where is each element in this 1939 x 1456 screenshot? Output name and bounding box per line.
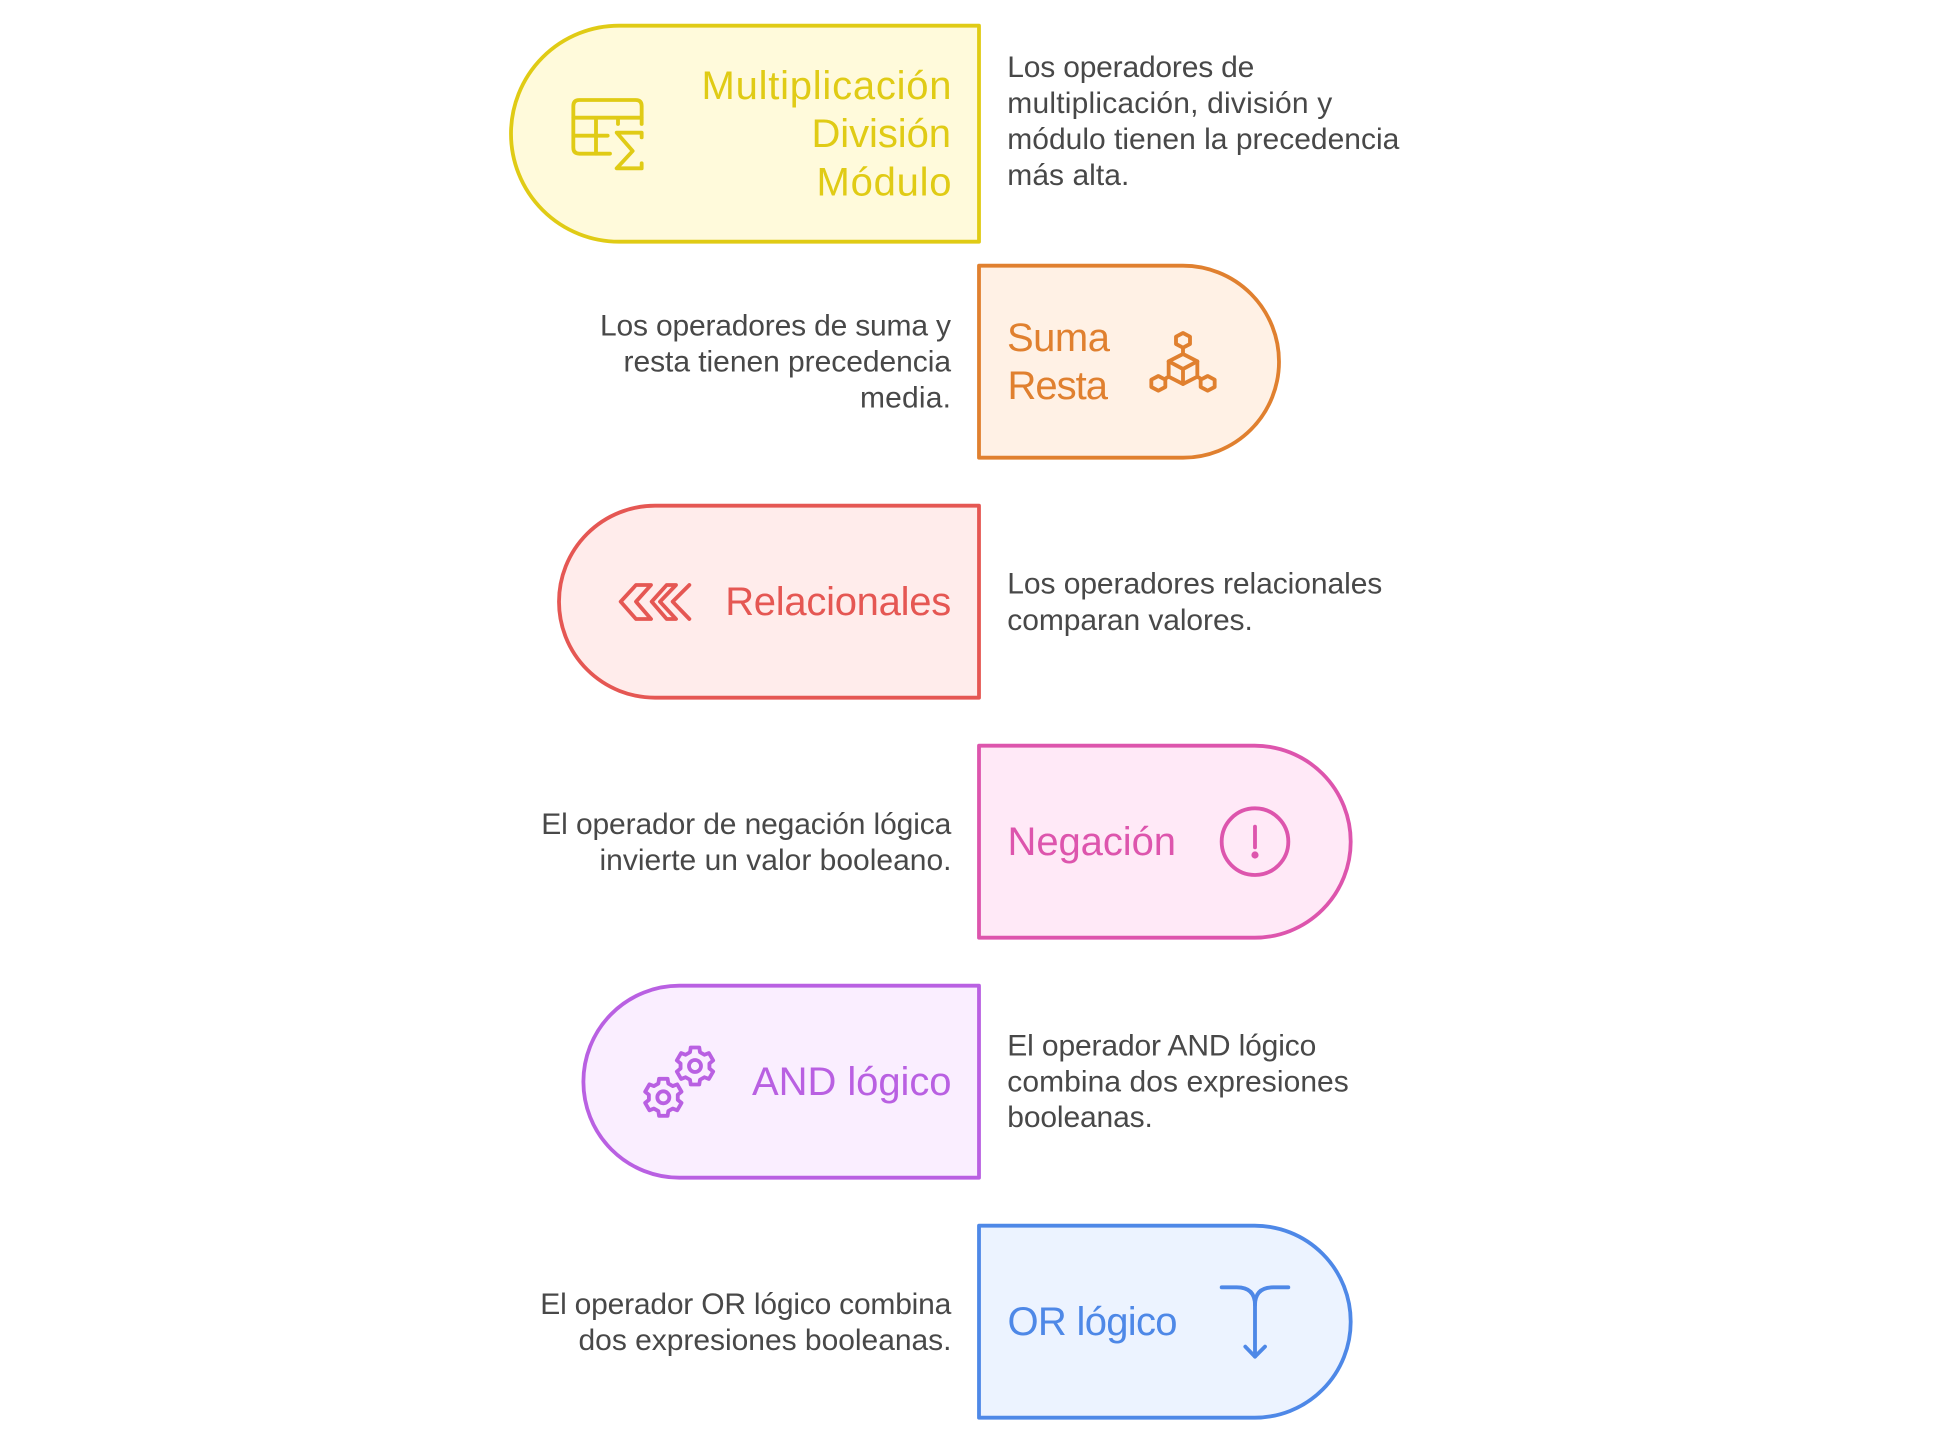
description: OR lógico: dos expresiones booleanas.: [578, 1324, 952, 1357]
description: AND lógico: [1007, 1030, 1349, 1134]
description: multiplicación: multiplicación, división y: [1007, 87, 1332, 120]
icon: table with sigma: [573, 100, 642, 168]
heading: Suma Resta: Resta: [1008, 364, 1109, 408]
panel shape: orange: [979, 266, 1279, 458]
panel: Suma Resta: [979, 266, 1279, 458]
heading: Relacionales: Relacionales: [725, 580, 951, 624]
description: AND lógico: booleanas.: [1007, 1101, 1153, 1134]
panel: Negación: [979, 746, 1351, 938]
heading: Negación: Negación: [1008, 820, 1176, 864]
description: suma y resta: Los operadores de suma y: [600, 310, 951, 342]
panel: Multiplicación División Módulo: [511, 26, 979, 242]
heading: Suma Resta: Suma: [1007, 316, 1111, 360]
description: AND lógico: El operador AND lógico: [1007, 1030, 1316, 1062]
description: negación: El operador de negación lógica: [541, 808, 952, 841]
panel: AND lógico: [583, 986, 979, 1178]
panel: OR lógico: [979, 1226, 1351, 1418]
panel shape: yellow: [511, 26, 979, 242]
description: relacionales: Los operadores relacionales: [1007, 568, 1382, 600]
description: suma y resta: [600, 310, 951, 414]
description: OR lógico: El operador OR lógico combina: [540, 1288, 952, 1321]
description: multiplicación: Los operadores de: [1007, 51, 1254, 84]
description: relacionales: comparan valores.: [1007, 604, 1253, 637]
icon: triple chevrons: [621, 585, 689, 619]
description: negación: [541, 808, 952, 877]
description: suma y resta: resta tienen precedencia: [624, 346, 951, 378]
icon: cube network: [1151, 333, 1215, 391]
description: OR lógico: [540, 1288, 952, 1357]
description: suma y resta: media.: [860, 382, 951, 414]
heading: Multiplicación División Módulo: Multiplicación: [702, 64, 952, 108]
heading: Suma Resta: [1007, 316, 1111, 408]
description: negación: invierte un valor booleano.: [600, 844, 952, 877]
heading: OR lógico: OR lógico: [1008, 1300, 1178, 1344]
heading: Multiplicación División Módulo: Módulo: [816, 160, 952, 204]
icon: two gears: [645, 1047, 713, 1116]
panel shape: pink: [979, 746, 1351, 938]
description: relacionales: [1007, 568, 1382, 637]
description: AND lógico: combina dos expresiones: [1007, 1066, 1349, 1098]
heading: Multiplicación División Módulo: División: [812, 112, 951, 156]
icon: exclamation circle: [1222, 808, 1288, 875]
description: multiplicación: más alta.: [1007, 159, 1129, 192]
heading: Multiplicación División Módulo: [702, 64, 952, 204]
heading: AND lógico: AND lógico: [752, 1060, 952, 1104]
description: multiplicación: módulo tienen la precedencia: [1007, 123, 1400, 156]
icon: merging arrow: [1222, 1287, 1288, 1357]
description: multiplicación: [1007, 51, 1400, 192]
panel shape: purple: [583, 986, 979, 1178]
panel shape: blue: [979, 1226, 1351, 1418]
panel shape: red: [559, 506, 979, 698]
panel: Relacionales: [559, 506, 979, 698]
